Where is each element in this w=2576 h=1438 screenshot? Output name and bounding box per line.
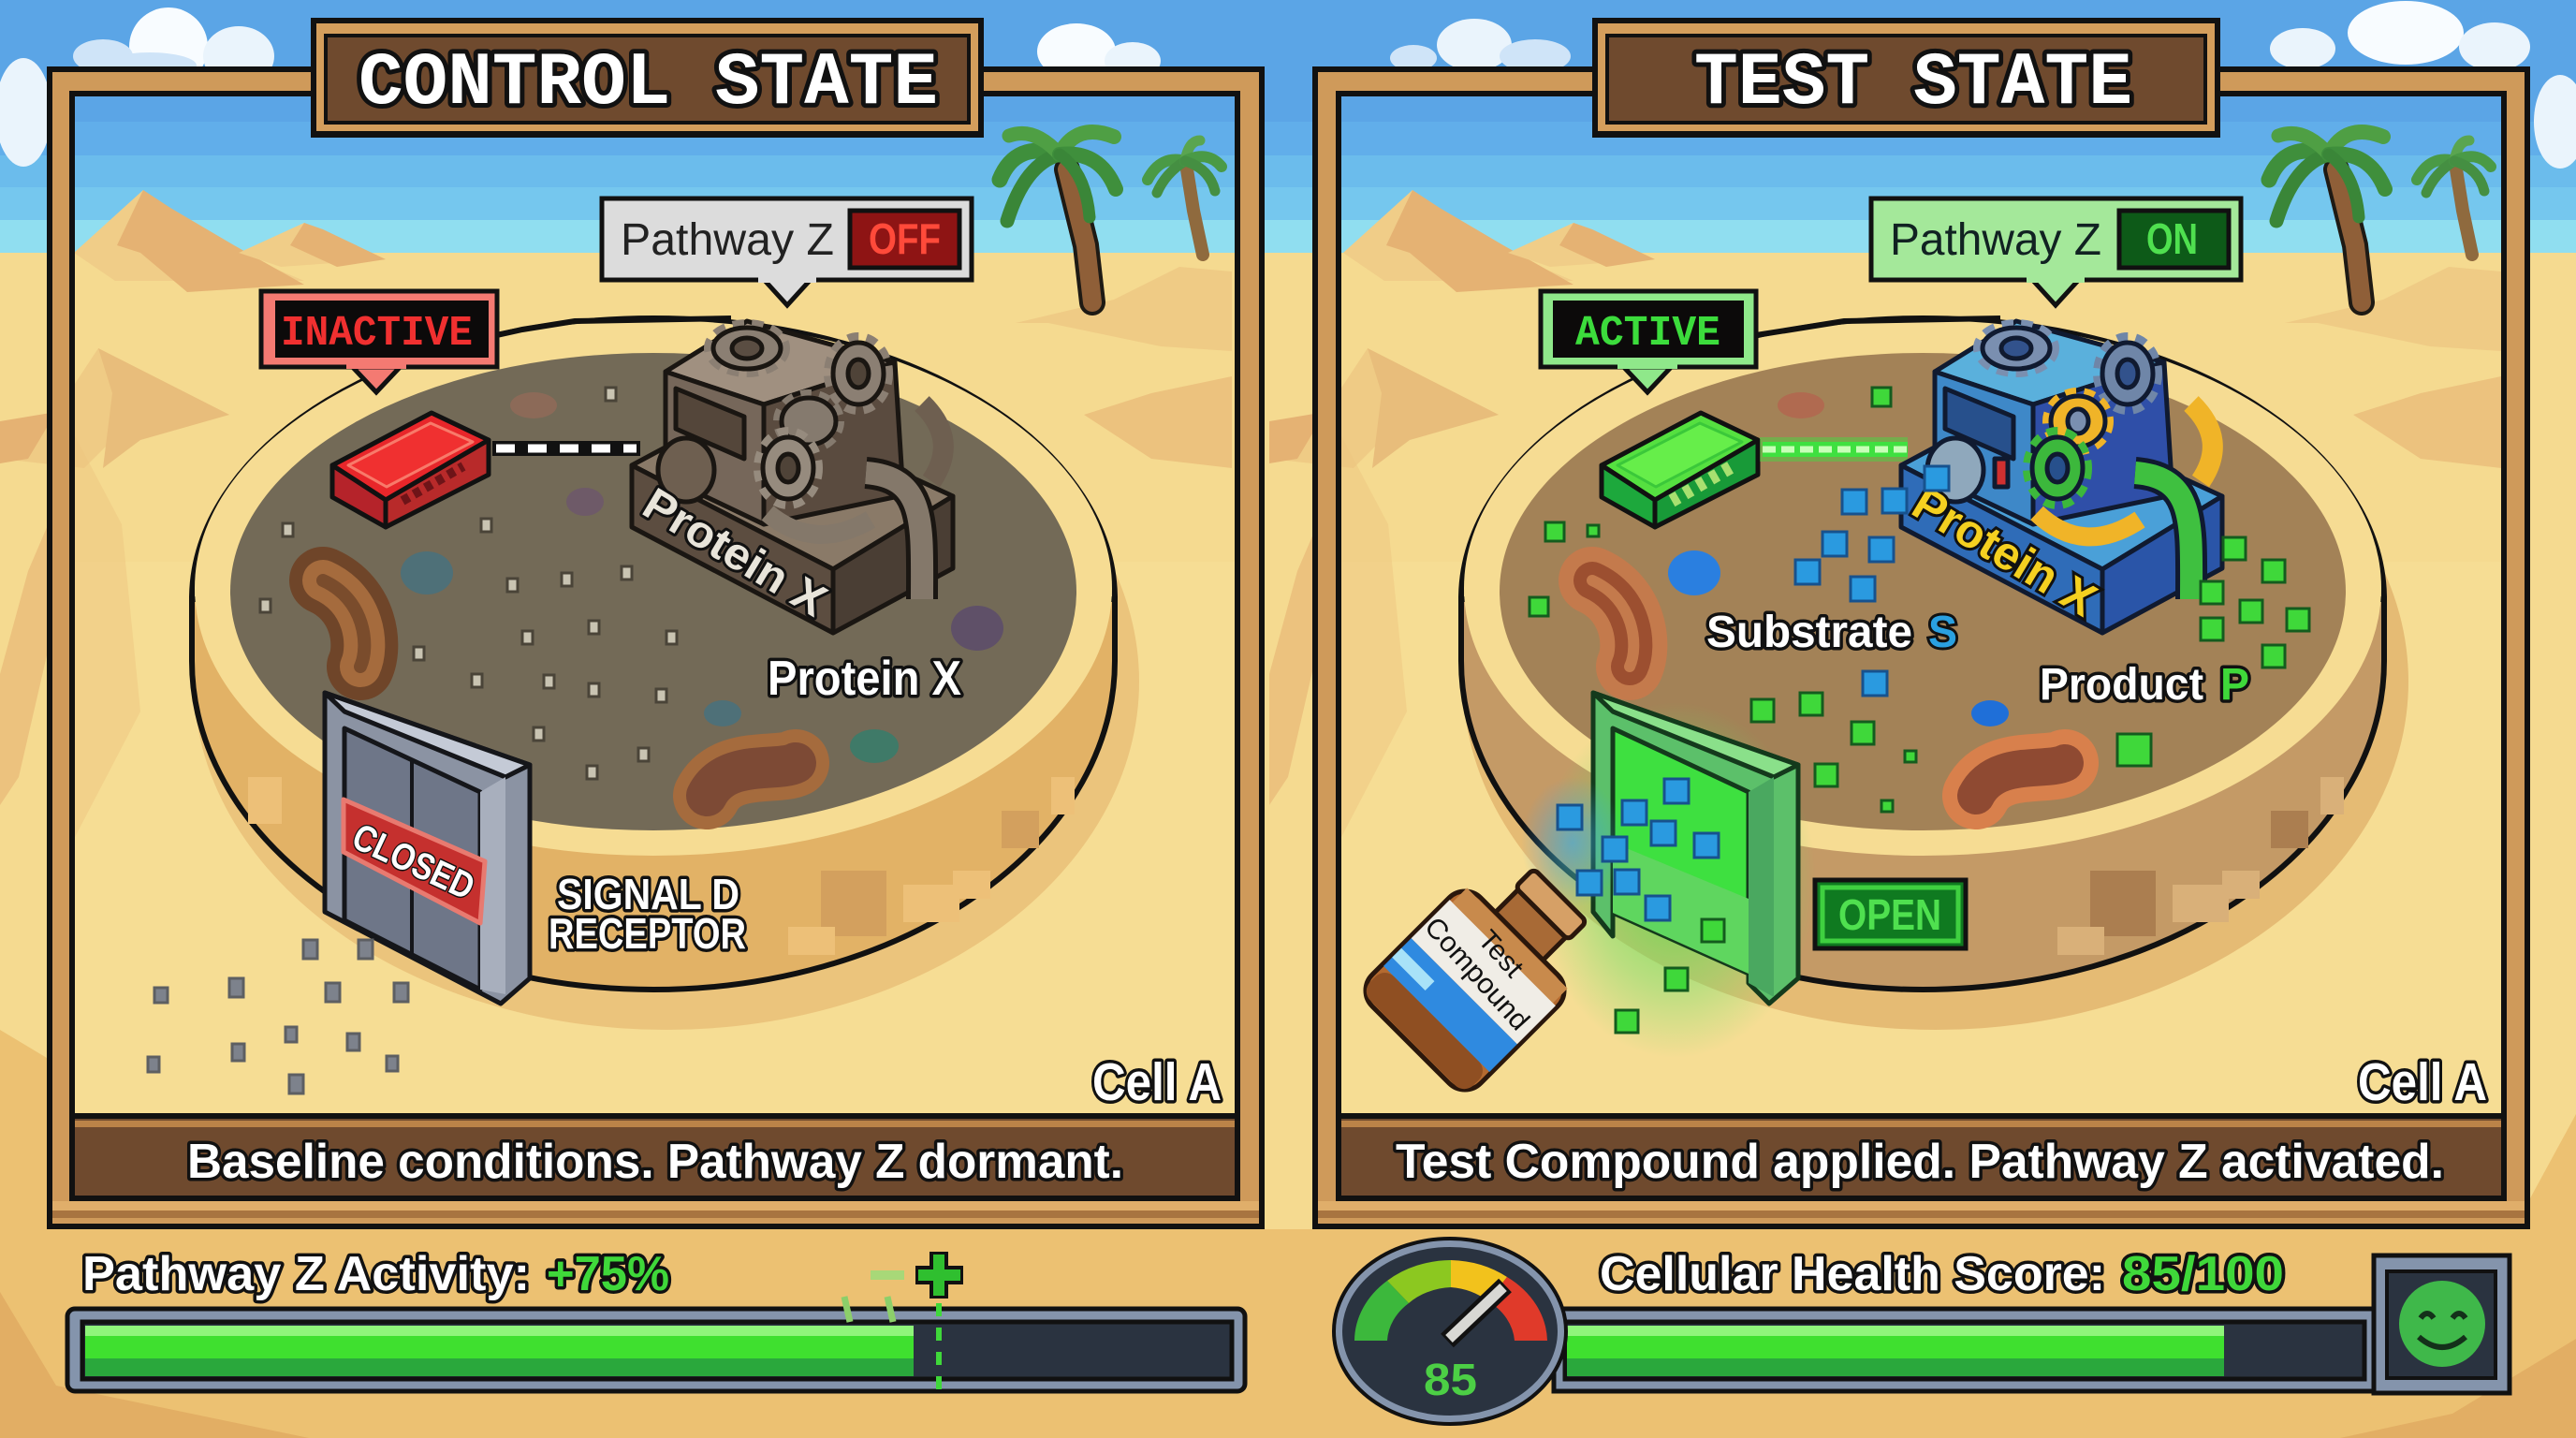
machine: protein x active — [1901, 321, 2222, 633]
progress bar — [67, 1303, 1245, 1395]
tag: inactive: INACTIVE — [281, 310, 473, 358]
vial label text: Compound — [1418, 912, 1535, 1036]
tag: active — [1541, 291, 1756, 392]
progress bar — [1554, 1309, 2378, 1391]
label: cell a: Cell A — [2358, 1052, 2487, 1112]
cytoplasm floor — [1500, 353, 2346, 830]
label: protein x: Protein X — [768, 652, 961, 706]
gauge — [1334, 1239, 1566, 1424]
organelles — [1592, 392, 2065, 796]
label: protein x on machine: Protein X — [1904, 477, 2105, 626]
vial label text: Test — [1471, 925, 1530, 984]
callout: pathway z off: Pathway Z — [621, 215, 834, 265]
caption: test: Test Compound applied. Pathway Z activated. — [1396, 1135, 2444, 1189]
machine: protein x dormant — [632, 321, 953, 633]
label: signal d receptor: SIGNAL D — [557, 870, 739, 918]
blocked signal molecules — [148, 940, 408, 1093]
panel: test state — [1356, 198, 2487, 1112]
glowing signal — [1760, 437, 1908, 462]
callout: pathway z on: Pathway Z — [1890, 215, 2101, 265]
receptor door: closed — [325, 693, 530, 1004]
connector line from active tag — [1756, 318, 2000, 335]
inert molecules on floor — [260, 388, 677, 779]
tag: active: ACTIVE — [1575, 310, 1720, 358]
cell: control — [192, 318, 1139, 1030]
caption: test — [1339, 1116, 2504, 1198]
title plaque: control state — [311, 18, 984, 138]
label: pathway z activity: Pathway Z Activity: — [82, 1247, 530, 1301]
substrate particles — [1558, 466, 1949, 920]
frame: test — [1315, 18, 2527, 1226]
label: product p: Product — [2040, 660, 2203, 710]
panel: control state — [148, 198, 1222, 1112]
cell: test — [1461, 318, 2408, 1058]
closed sign: CLOSED — [346, 816, 480, 908]
organelles — [323, 392, 1003, 796]
vial: test compound — [1356, 841, 1615, 1099]
label: open — [1815, 880, 1966, 948]
meter: pathway z activity — [67, 1247, 1245, 1395]
label: signal d receptor — [549, 870, 746, 958]
caption: control — [72, 1116, 1237, 1198]
meter: cellular health score — [1334, 1239, 2510, 1424]
icon: smiley — [2374, 1255, 2510, 1393]
receptor door: open with glow — [1521, 693, 1816, 1058]
label: cellular health score: 85/100 — [2122, 1247, 2284, 1301]
active receptor switch — [1602, 413, 1758, 527]
title plaque: control state: CONTROL STATE — [359, 41, 938, 126]
label: product p: P — [2220, 660, 2249, 710]
label: signal d receptor: RECEPTOR — [549, 909, 746, 958]
callout: pathway z on — [1871, 198, 2241, 305]
label: substrate s: S — [1928, 608, 1957, 657]
connector line from inactive tag — [497, 318, 731, 335]
gauge: 85 — [1424, 1356, 1477, 1405]
label: pathway z activity: +75% — [547, 1247, 669, 1301]
icon: plus — [844, 1252, 963, 1322]
title plaque: test state — [1592, 18, 2220, 138]
callout: pathway z off: OFF — [869, 214, 941, 263]
label: cellular health score: Cellular Health Score: — [1600, 1247, 2105, 1301]
tag: inactive — [261, 291, 497, 392]
inactive receptor switch — [332, 413, 489, 527]
callout: pathway z on: ON — [2146, 214, 2198, 263]
label: substrate s: Substrate — [1706, 608, 1912, 657]
callout: pathway z off — [602, 198, 972, 305]
title plaque: test state: TEST STATE — [1694, 41, 2132, 126]
frame: control — [50, 18, 1262, 1226]
label: protein x on machine: Protein X — [635, 479, 835, 626]
dashed inactive signal — [492, 441, 640, 456]
cytoplasm floor — [230, 353, 1076, 830]
product particles — [1530, 388, 2309, 1033]
label: open: OPEN — [1838, 890, 1941, 939]
caption: control: Baseline conditions. Pathway Z dormant. — [187, 1135, 1123, 1189]
label: cell a: Cell A — [1092, 1052, 1222, 1112]
